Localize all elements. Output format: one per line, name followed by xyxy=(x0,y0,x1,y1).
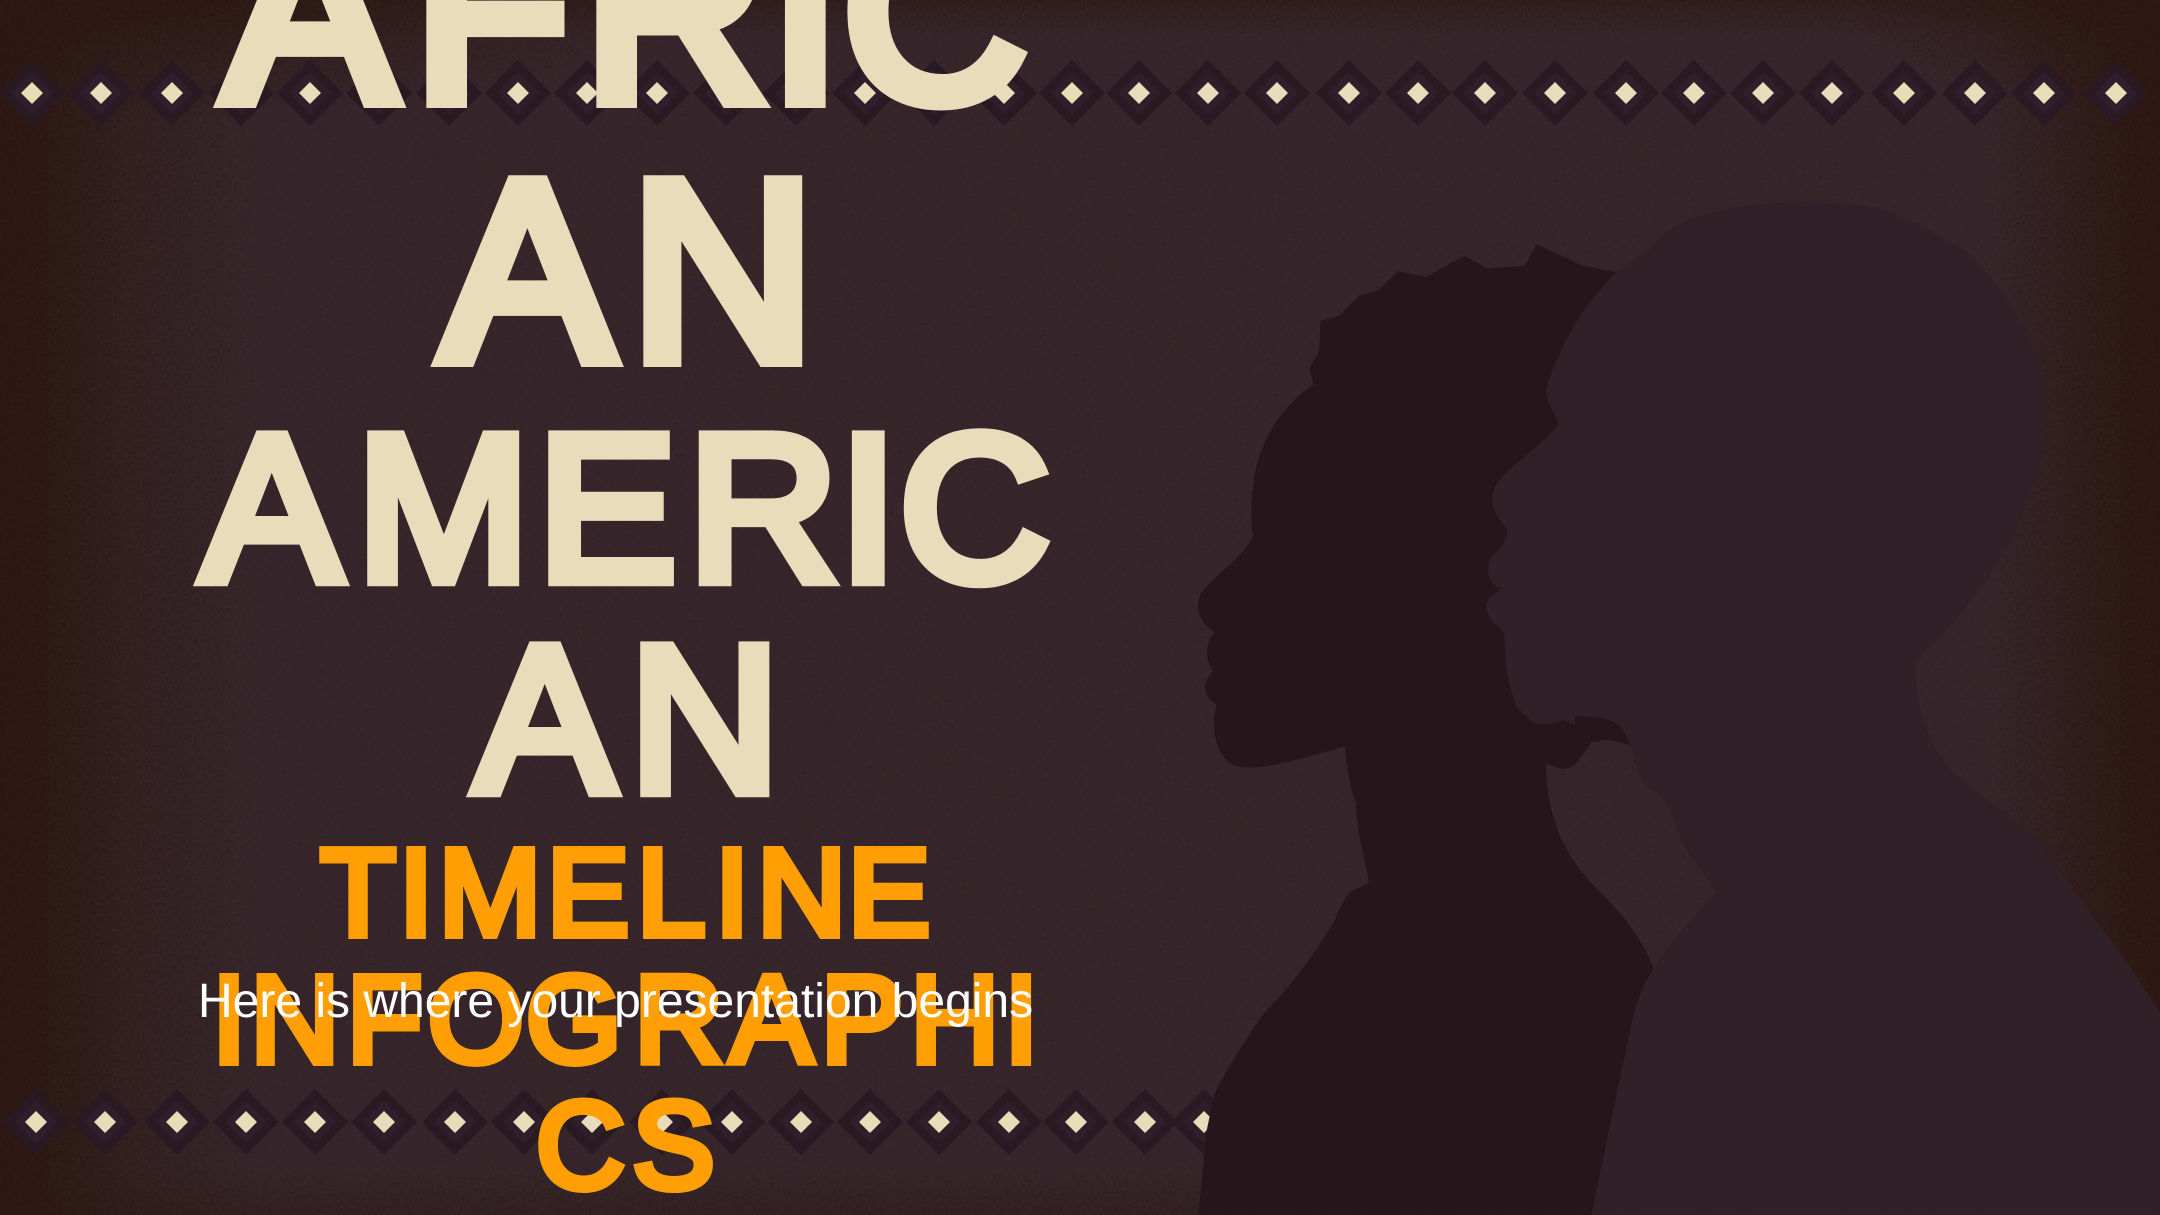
title: AFRICAN AMERICAN: AMERIC xyxy=(202,392,1050,624)
subtitle: TIMELINE INFOGRAPHICS: TIMELINE xyxy=(320,825,930,962)
pattern: top diamond border xyxy=(0,60,2149,126)
title: AFRICAN AMERICAN: AN xyxy=(442,128,814,412)
pattern: bottom diamond border xyxy=(3,1089,1237,1155)
tagline: Here is where your presentation begins xyxy=(198,975,1033,1028)
subtitle: TIMELINE INFOGRAPHICS: INFOGRAPHI xyxy=(212,952,1038,1089)
title: AFRICAN AMERICAN xyxy=(202,0,1050,834)
subtitle: TIMELINE INFOGRAPHICS xyxy=(212,825,1038,1215)
illustration: two profile silhouettes xyxy=(1198,202,2160,1215)
subtitle: TIMELINE INFOGRAPHICS: CS xyxy=(536,1078,715,1215)
silhouette: man (back) xyxy=(1486,202,2160,1215)
title: AFRICAN AMERICAN: AN xyxy=(476,604,780,834)
silhouette: woman with headwrap (front) xyxy=(1198,244,1665,1215)
